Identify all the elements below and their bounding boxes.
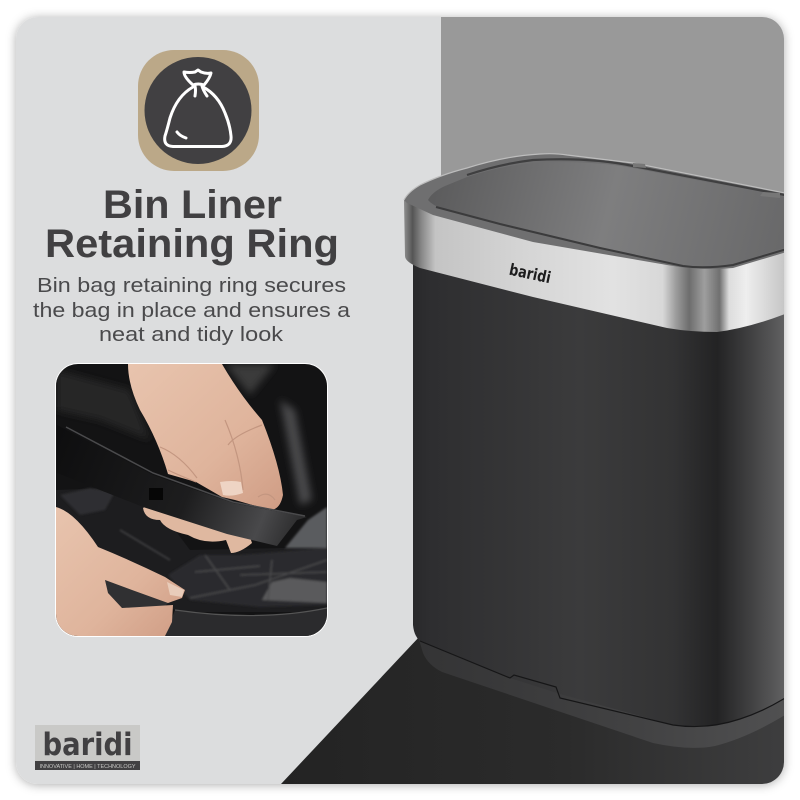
- logo wordmark: baridi: [42, 727, 132, 763]
- upper hand: [128, 364, 283, 510]
- badge dark circle: [144, 57, 252, 164]
- lid outer ring: [404, 154, 790, 269]
- photo frame: [55, 363, 328, 637]
- lower hand: [56, 507, 185, 636]
- bin interior background: [56, 364, 327, 636]
- icon: bin bag badge: [138, 50, 259, 171]
- bin base: [418, 636, 790, 748]
- bag folds: [56, 488, 327, 612]
- photo: hands fitting retaining ring: [55, 363, 328, 637]
- gripping fingertips: [143, 506, 252, 553]
- base seam and latch: [420, 641, 790, 727]
- lower ring: [165, 608, 327, 636]
- description text: neat and tidy look: [99, 323, 284, 346]
- lid rear edge: [467, 159, 790, 196]
- dark floor: [281, 636, 800, 784]
- thumb nail: [220, 481, 243, 496]
- description text: Bin bag retaining ring secures: [37, 274, 346, 297]
- logo backing: [35, 725, 140, 762]
- rim band: [404, 200, 790, 332]
- lid clips: [633, 163, 780, 198]
- title: Retaining Ring: [45, 222, 339, 266]
- pinched bag strip: [105, 580, 168, 608]
- lower thumb nail: [167, 582, 184, 597]
- grey wall panel: [441, 17, 784, 253]
- lid front edge: [436, 207, 790, 267]
- upper hand finger shading: [160, 420, 275, 500]
- retaining ring band: [97, 483, 306, 546]
- badge tan tile: [138, 50, 259, 171]
- bag sheen: [60, 488, 327, 607]
- bin body: [413, 258, 790, 727]
- title: Bin Liner: [103, 183, 282, 227]
- lid top surface: [428, 163, 675, 258]
- product scene: grey wall, floor and bin: [281, 17, 800, 784]
- lid ring highlight: [404, 154, 790, 200]
- description text: the bag in place and ensures a: [33, 299, 351, 322]
- ring slot: [149, 488, 163, 500]
- tagline bar: [35, 761, 140, 770]
- bin logo: baridi: [508, 260, 553, 287]
- tagline: INNOVATIVE | HOME | TECHNOLOGY: [40, 764, 136, 770]
- lower ring lip: [175, 608, 327, 616]
- bag outline: [165, 70, 231, 146]
- brand logo: [35, 725, 140, 770]
- ring top lip: [66, 427, 305, 516]
